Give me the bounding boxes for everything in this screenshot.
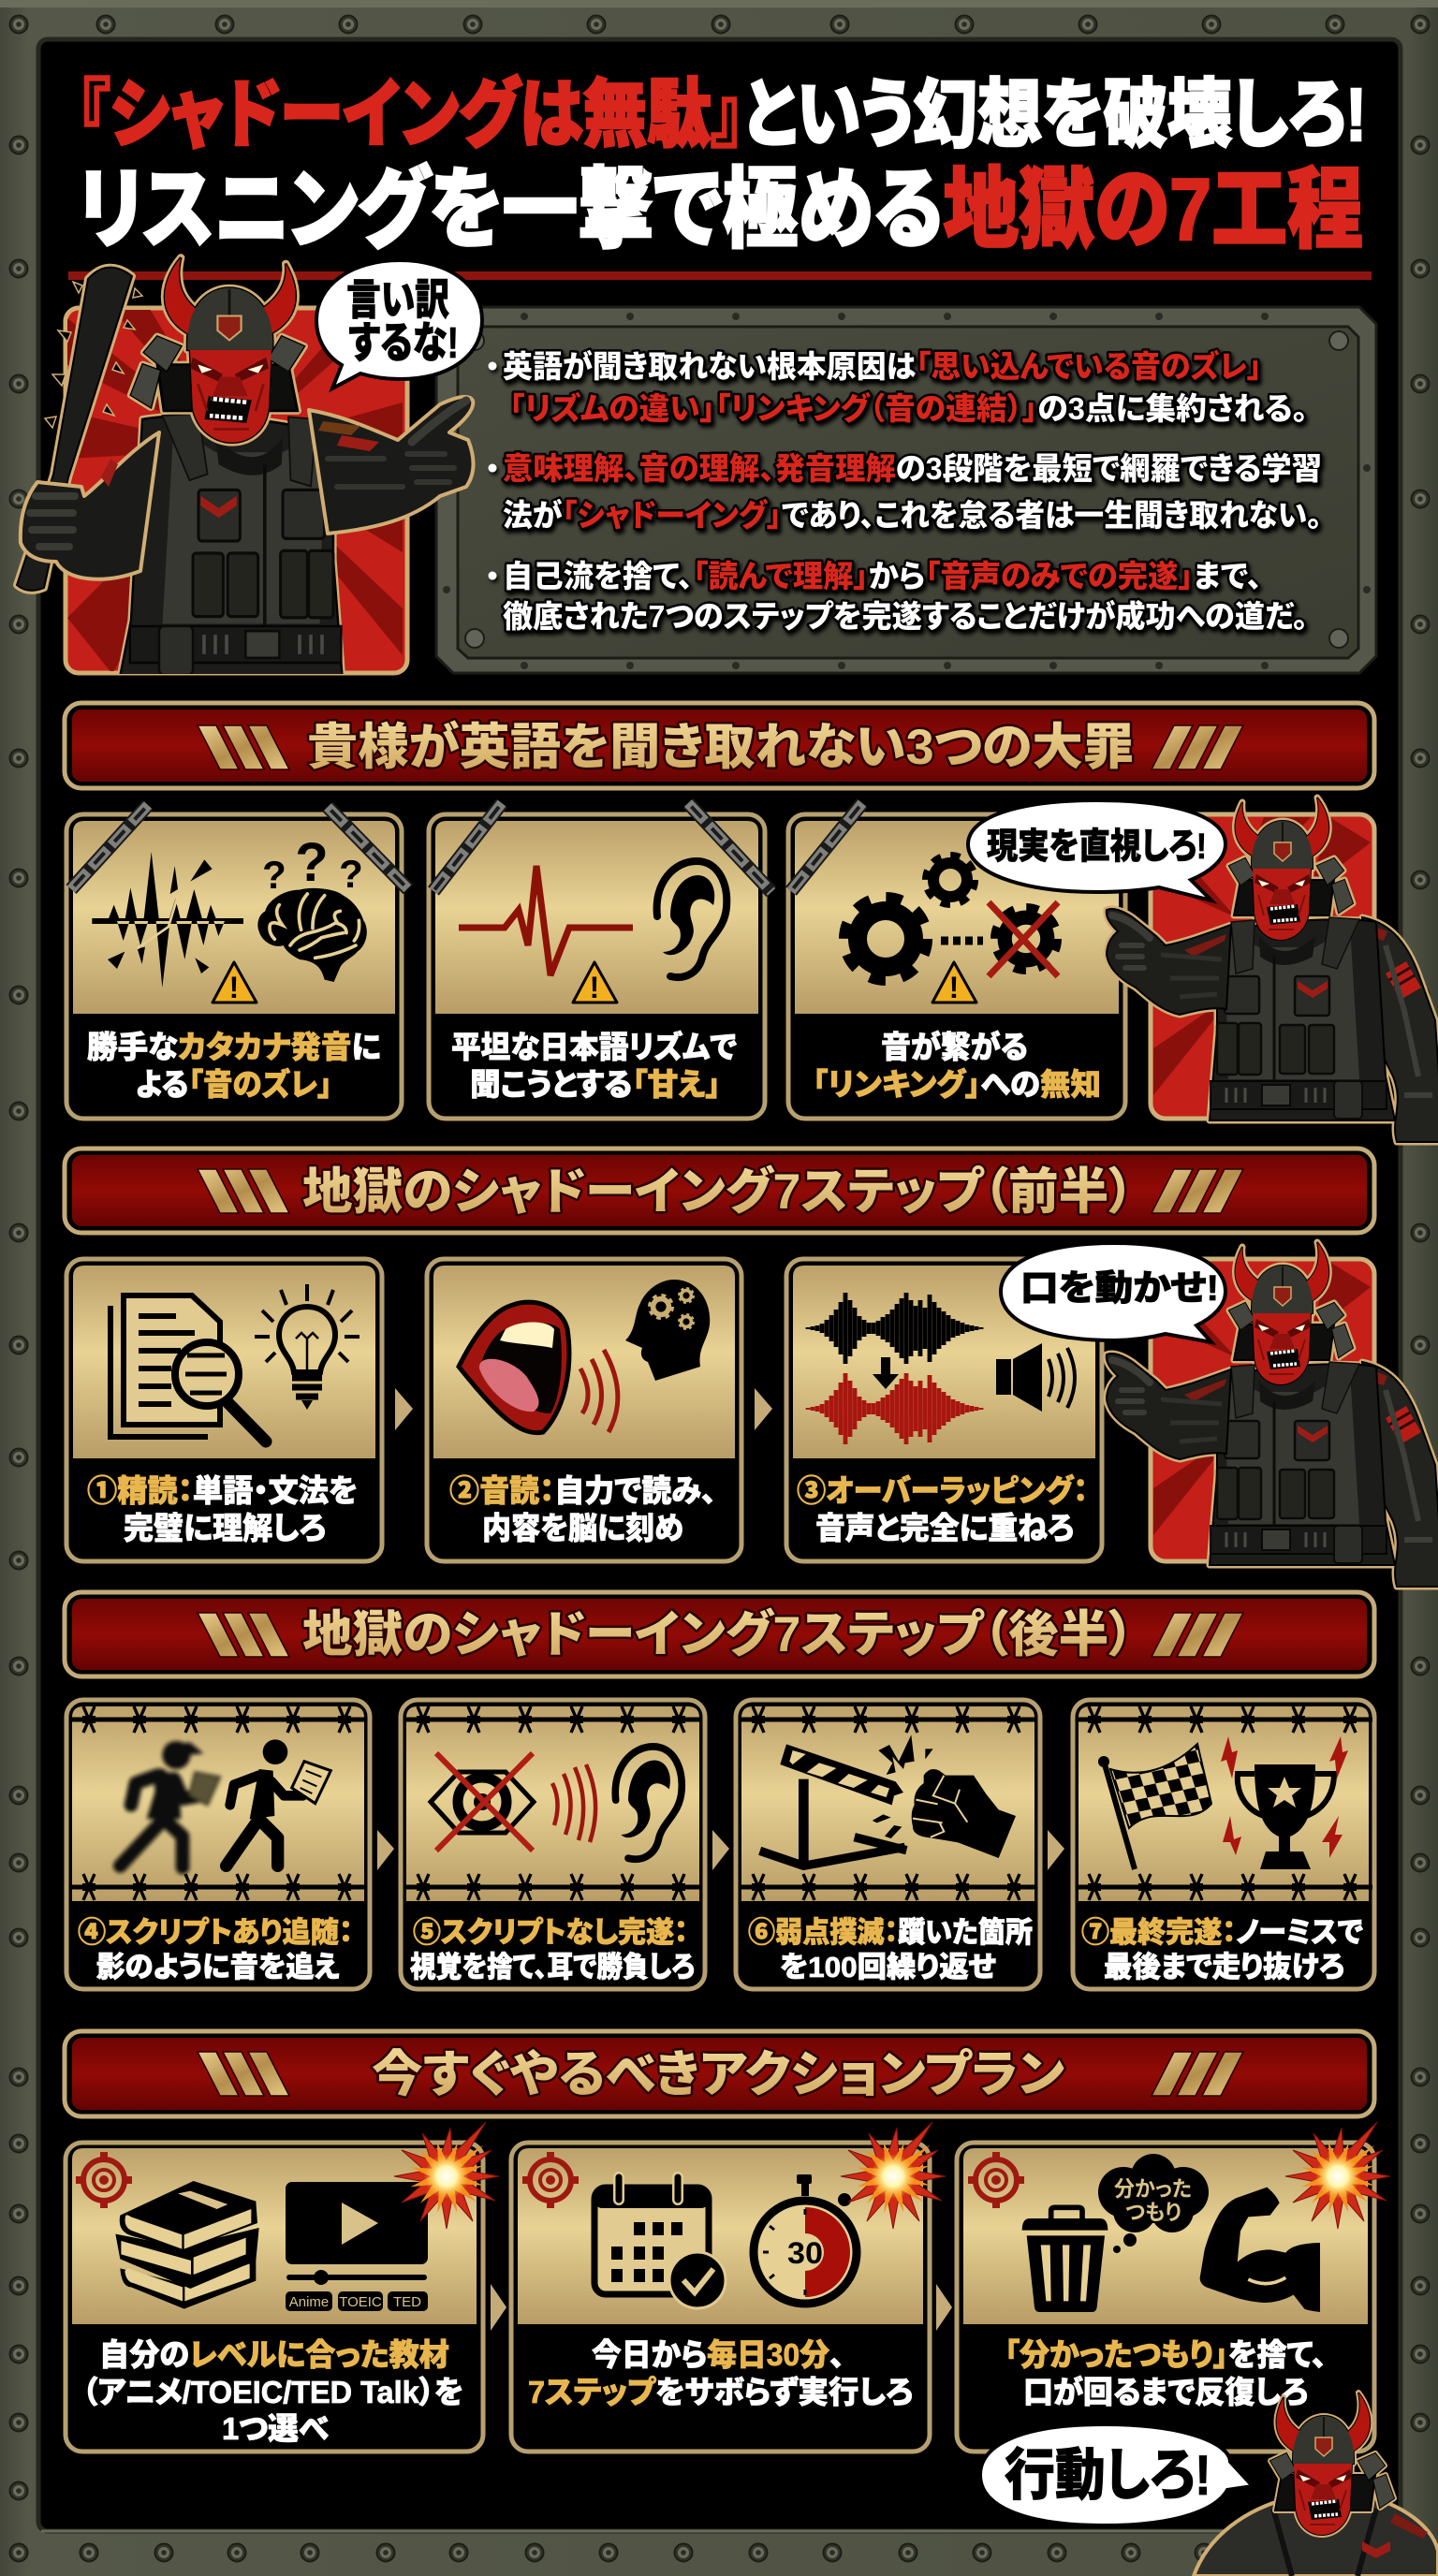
panel: action 3 [957, 2122, 1390, 2452]
oni arm holding club [21, 432, 159, 579]
panel: step 6 [736, 1700, 1040, 1989]
arrow [377, 1830, 394, 1870]
caption: ②音読：自力で読み、 [449, 1473, 716, 1508]
icon: noisy waveform [92, 852, 243, 988]
title [78, 73, 1367, 258]
icon: shouting mouth [459, 1302, 569, 1433]
icon: speaker [996, 1343, 1075, 1412]
panel: step 7 [1073, 1700, 1374, 1989]
caption: 口が回るまで反復しろ [1023, 2375, 1308, 2409]
speech bubble: 言い訳するな [316, 260, 482, 388]
caption [451, 1030, 738, 1102]
caption: 聞こうとする「甘え」 [470, 1067, 721, 1102]
caption: を100回繰り返せ [780, 1951, 996, 1983]
panel: hero portrait [17, 257, 474, 678]
icon: light bulb [255, 1284, 360, 1410]
icon: brain with question marks: ? [339, 852, 363, 896]
icon: red waveform [808, 1373, 981, 1444]
speech bubble: 行動しろ: 行動しろ! [1005, 2444, 1211, 2507]
caption [813, 1030, 1101, 1102]
speech bubble: 言い訳するな: するな! [348, 318, 459, 367]
caption: 「リンキング」への無知 [813, 1067, 1101, 1102]
caption: 1つ選べ [222, 2411, 329, 2446]
caption: 「分かったつもり」を捨て、 [1005, 2337, 1327, 2372]
icon: gears with broken link [846, 856, 1058, 978]
icon: brain with question marks [257, 832, 367, 982]
heading: section 1: 貴様が英語を聞き取れない3つの大罪 [307, 719, 1134, 775]
caption: 影のように音を追え [96, 1951, 340, 1983]
caption: 自分のレベルに合った教材 [99, 2337, 449, 2372]
icon: warning: ! [229, 971, 239, 1004]
icon: video player: TOEIC [339, 2294, 382, 2310]
caption [1005, 2337, 1327, 2409]
bullet text 3: 徹底された7つのステップを完遂することだけが成功への道だ。 [503, 599, 1308, 634]
bullet text 1 [489, 349, 1308, 426]
caption [87, 1473, 358, 1545]
caption [410, 1916, 695, 1983]
oni pointing arm [309, 397, 474, 534]
icon: book stack [115, 2181, 259, 2309]
icon: thought cloud [1098, 2154, 1209, 2253]
icon: impact spark [878, 1734, 933, 1775]
caption: ⑥弱点撲滅：躓いた箇所 [748, 1916, 1033, 1949]
speech bubble: 口を動かせ [1001, 1243, 1225, 1342]
caption: 完璧に理解しろ [124, 1511, 326, 1545]
title line 2: リスニングを一撃で極める地獄の7工程 [78, 160, 1363, 258]
heading: section 2: 地獄のシャドーイング7ステップ（前半） [302, 1164, 1134, 1220]
speech bubble: 現実を直視しろ: 現実を直視しろ! [987, 827, 1207, 867]
caption: 音声と完全に重ねろ [815, 1511, 1074, 1545]
icon: brain with question marks: ? [262, 853, 286, 897]
panel: step 3 [786, 1259, 1102, 1561]
icon: thought cloud: つもり [1125, 2200, 1181, 2224]
icon: target [76, 2152, 132, 2208]
arrow [491, 2284, 506, 2331]
caption: ①精読：単語・文法を [87, 1473, 358, 1508]
caption [82, 2337, 463, 2446]
caption: よる「音のズレ」 [136, 1067, 332, 1102]
heading: section 3 [65, 1592, 1374, 1676]
icon: spiked club [17, 268, 142, 591]
arrow [755, 1388, 772, 1430]
panel: sin 2 [429, 803, 771, 1119]
character: oni 3 [1107, 1242, 1438, 1587]
panel: action 2 [511, 2122, 946, 2452]
caption: 内容を脳に刻め [482, 1511, 683, 1545]
caption [1081, 1916, 1363, 1983]
icon: calendar [594, 2177, 726, 2308]
icon: checkered flag [1098, 1744, 1211, 1869]
arrow [712, 1830, 729, 1870]
caption: 7ステップをサボらず実行しろ [528, 2375, 913, 2409]
bullet text 2: 意味理解、音の理解、発音理解の3段階を最短で網羅できる学習 [503, 451, 1322, 486]
icon: warning: ! [590, 971, 599, 1004]
caption [528, 2337, 913, 2409]
icon: stopwatch [754, 2174, 857, 2304]
speech bubble: 口を動かせ: 口を動かせ! [1020, 1269, 1219, 1309]
caption: ④スクリプトあり追随： [78, 1916, 353, 1949]
caption: 視覚を捨て、耳で勝負しろ [410, 1951, 695, 1983]
icon: red lightning bolts [1221, 1736, 1348, 1858]
caption: 平坦な日本語リズムで [451, 1030, 738, 1064]
caption: 音が繋がる [881, 1030, 1028, 1064]
icon: brain with question marks: ? [295, 832, 329, 893]
bullet text 1: 英語が聞き取れない根本原因は「思い込んでいる音のズレ」 [503, 349, 1262, 384]
panel: sin 3 [788, 803, 1125, 1119]
title line 1: 『シャドーイングは無駄』という幻想を破壊しろ! [78, 73, 1367, 156]
panel: sin 1 [66, 805, 408, 1119]
speech bubble: 現実を直視しろ [968, 800, 1225, 900]
icon: trophy [1238, 1764, 1334, 1869]
icon: warning [213, 962, 257, 1004]
panel: step 4 [66, 1700, 370, 1989]
panel: red backdrop 2 [1151, 1259, 1374, 1561]
panel: step 5 [401, 1700, 705, 1989]
caption: ③オーバーラッピング： [797, 1473, 1088, 1508]
speech bubble: 言い訳するな: 言い訳 [346, 275, 449, 324]
caption [748, 1916, 1033, 1983]
speech bubble: 行動しろ [980, 2424, 1253, 2525]
icon: black waveform [808, 1293, 981, 1364]
icon: reader figure [227, 1739, 330, 1866]
heading: section 2 [65, 1149, 1374, 1233]
chain [791, 803, 862, 891]
icon: warning [932, 962, 976, 1004]
icon: head with gears [625, 1280, 710, 1381]
oni body and head [120, 257, 343, 678]
panel: summary plate [436, 307, 1376, 673]
icon: crossed-out eye [431, 1753, 534, 1851]
caption [87, 1030, 381, 1102]
caption: 今日から毎日30分、 [592, 2337, 844, 2372]
icon: ear [657, 861, 726, 977]
bullet text 1: 「リズムの違い」「リンキング（音の連結）」の3点に集約される。 [509, 391, 1308, 426]
icon: video player [286, 2182, 428, 2311]
panel: red backdrop 1 [1151, 814, 1374, 1119]
icon: target [522, 2152, 579, 2208]
character: oni 2 [1107, 798, 1438, 1142]
caption [797, 1473, 1088, 1545]
caption: （アニメ/TOEIC/TED Talk）を [82, 2375, 463, 2409]
icon: shadow person [120, 1741, 220, 1867]
panel: action 1 [66, 2122, 499, 2452]
bullet text 3: 自己流を捨て、「読んで理解」から「音声のみでの完遂」まで、 [503, 559, 1262, 593]
red rule [68, 271, 1372, 280]
icon: down arrow [873, 1357, 899, 1389]
caption: ⑤スクリプトなし完遂： [413, 1916, 688, 1949]
icon: smashed barrier [760, 1744, 906, 1866]
caption [449, 1473, 716, 1545]
heading: section 3: 地獄のシャドーイング7ステップ（後半） [302, 1606, 1134, 1662]
icon: explosion [1285, 2122, 1390, 2229]
bullet text 2 [489, 451, 1322, 533]
icon: fist [912, 1769, 1016, 1858]
arrow [936, 2284, 952, 2331]
icon: target [968, 2152, 1024, 2208]
icon: trash can [1022, 2207, 1108, 2312]
heading: section 1 [65, 703, 1374, 788]
chains [433, 803, 771, 892]
icon: document and magnifier [110, 1295, 266, 1442]
icon: warning [573, 962, 617, 1004]
icon: video player: TED [393, 2294, 421, 2310]
icon: explosion [394, 2122, 499, 2229]
icon: red sound arcs [580, 1350, 618, 1432]
heading: section 4 [65, 2031, 1374, 2116]
icon: explosion [841, 2122, 946, 2229]
icon: ear [615, 1747, 682, 1859]
character: oni 4 [1194, 2393, 1438, 2576]
caption: ⑦最終完遂：ノーミスで [1081, 1916, 1363, 1949]
icon: red sound arcs [552, 1764, 595, 1842]
panel: step 2 [427, 1259, 741, 1561]
icon: warning: ! [949, 971, 959, 1004]
icon: thought cloud: 分かった [1114, 2176, 1192, 2201]
caption [78, 1916, 353, 1983]
caption: 最後まで走り抜けろ [1104, 1951, 1344, 1983]
arrow [395, 1388, 413, 1430]
icon: flexed arm [1200, 2188, 1320, 2312]
heading: section 4: 今すぐやるべきアクションプラン [372, 2047, 1064, 2102]
icon: video player: Anime [289, 2294, 329, 2310]
caption: 勝手なカタカナ発音に [87, 1030, 381, 1064]
chains [71, 805, 408, 889]
icon: stopwatch: 30 [787, 2236, 823, 2270]
bullet text 3 [489, 559, 1308, 634]
bullet text 2: 法が「シャドーイング」であり、これを怠る者は一生聞き取れない。 [503, 498, 1322, 533]
icon: flat rhythm line [459, 866, 633, 975]
panel: step 1 [66, 1259, 382, 1561]
arrow [1048, 1830, 1064, 1870]
